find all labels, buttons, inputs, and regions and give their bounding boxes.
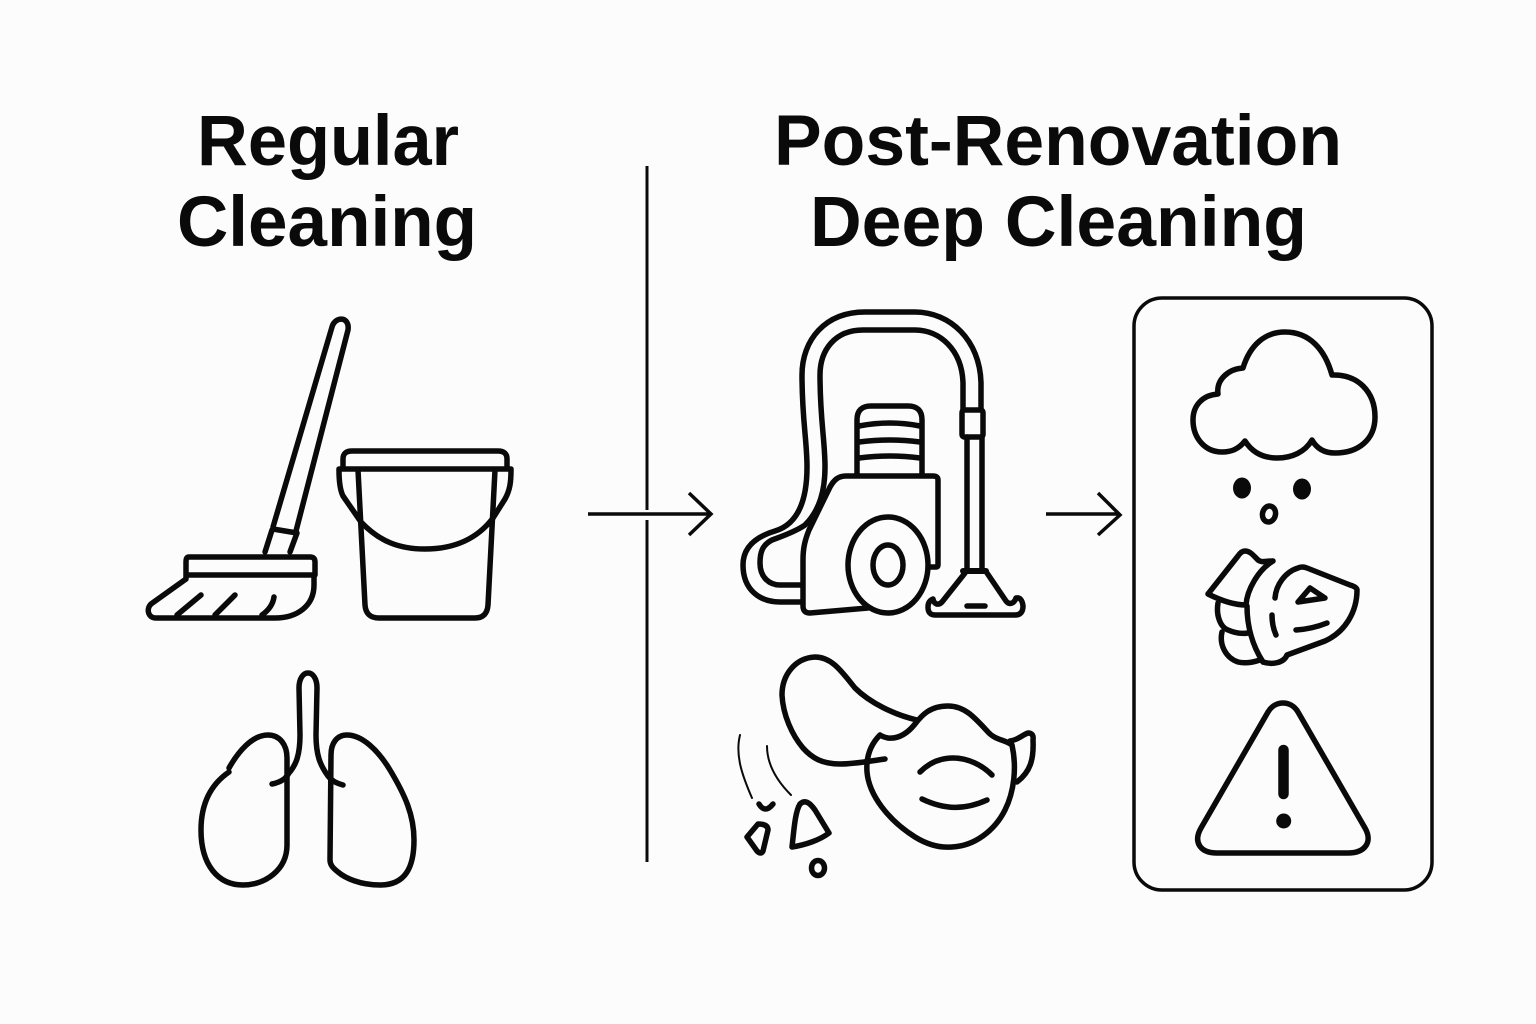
arrow: regular to deep cleaning — [588, 493, 711, 535]
icon: lungs — [201, 673, 414, 885]
vacuum wheel — [848, 517, 928, 613]
mask pleats — [920, 758, 992, 775]
heading: Regular Cleaning — [177, 102, 477, 262]
debris — [759, 804, 773, 809]
icon: gloved hand — [1208, 551, 1357, 663]
heading: Post-Renovation Deep Cleaning: Post-Renovation — [774, 102, 1342, 181]
icon: dust particles — [1233, 478, 1311, 523]
icon: broom — [148, 319, 348, 618]
arrow: deep cleaning to hazards — [1046, 493, 1120, 535]
vacuum wand and nozzle — [962, 410, 983, 437]
heading: Regular Cleaning: Cleaning — [177, 183, 477, 262]
panel: hazards — [1134, 298, 1432, 890]
mask strap — [782, 657, 917, 764]
divider line — [646, 166, 648, 862]
heading: Regular Cleaning: Regular — [197, 102, 459, 181]
vacuum body — [803, 476, 938, 613]
heading: Post-Renovation Deep Cleaning: Deep Cleaning — [810, 183, 1307, 262]
vacuum filter — [857, 406, 922, 475]
icon: warning triangle — [1198, 703, 1368, 853]
heading: Post-Renovation Deep Cleaning — [774, 102, 1342, 262]
motion lines — [738, 735, 791, 798]
icon: vacuum cleaner — [743, 312, 1023, 615]
icon: dust cloud — [1193, 332, 1375, 458]
vacuum hose — [743, 312, 981, 602]
mask body — [867, 706, 1014, 847]
icon: bucket — [339, 451, 511, 618]
icon: dust mask with debris — [738, 657, 1033, 876]
